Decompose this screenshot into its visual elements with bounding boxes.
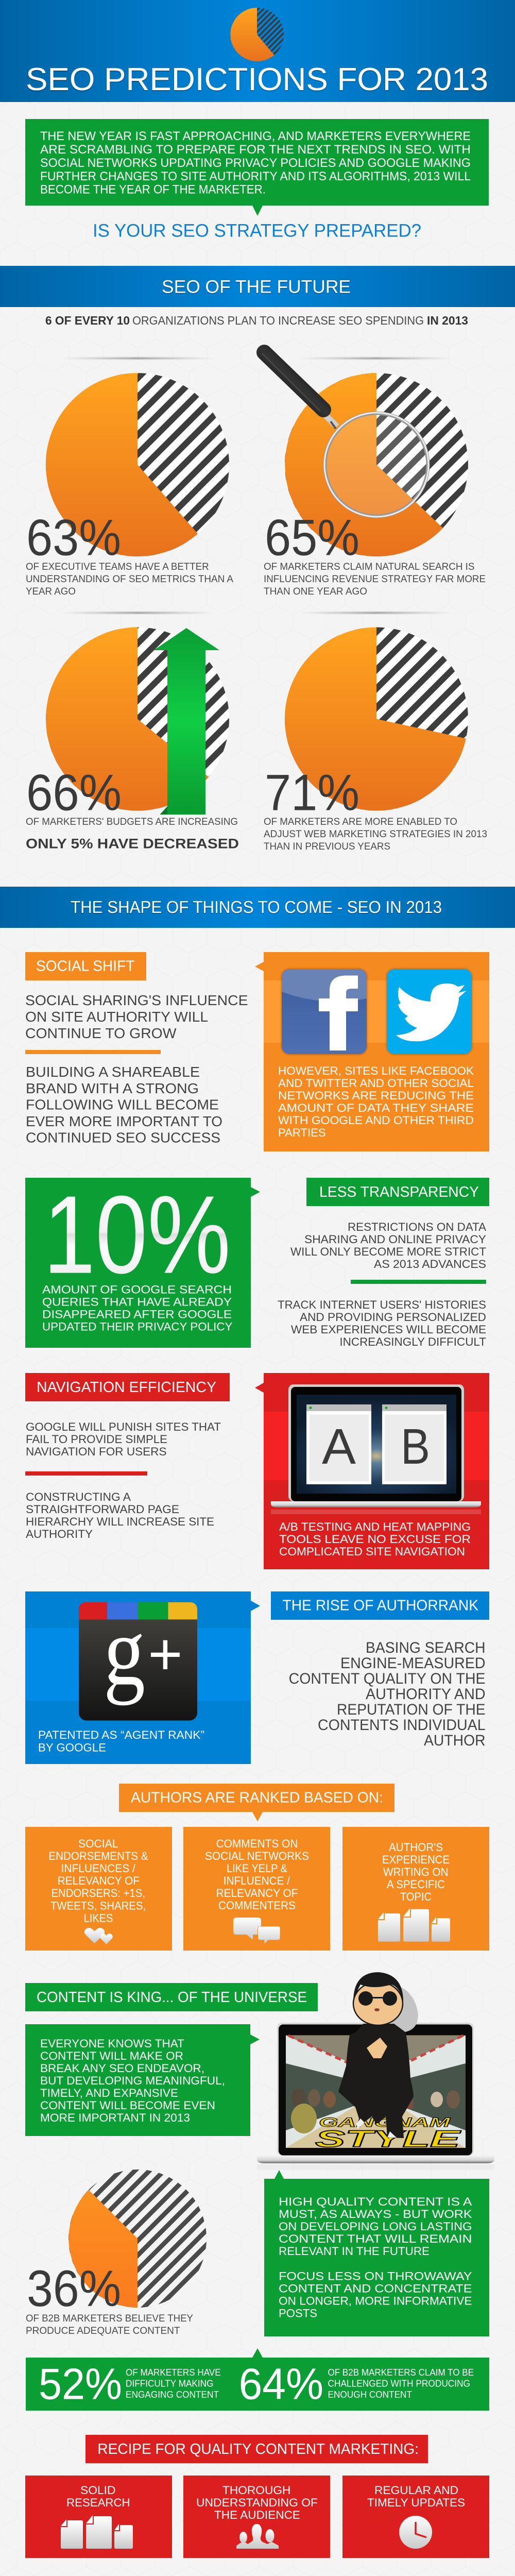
panel: everyone knows: MORE IMPORTANT IN 2013: [40, 2111, 190, 2124]
text: google will punish: [26, 1420, 221, 1458]
header banner: [0, 0, 515, 102]
text: social sharing influence: CONTINUE TO GROW: [25, 1025, 177, 1041]
text: basing search: ENGINE-MEASURED: [340, 1655, 486, 1672]
pie chart: 71%: 71%: [265, 764, 359, 821]
panel: comments on social networks: LIKE YELP &: [227, 1862, 287, 1875]
text: shareable brand: [26, 1064, 222, 1146]
panel: 52 and 64 percent: CHALLENGED WITH PRODUCING: [328, 2379, 470, 2389]
text: basing search: REPUTATION OF THE: [337, 1701, 486, 1718]
panel: A/B testing: [255, 1373, 489, 1569]
tag: recipe for quality content: RECIPE FOR QUALITY CONTENT MARKETING:: [97, 2441, 419, 2458]
text: restrictions: RESTRICTIONS ON DATA: [348, 1221, 486, 1233]
panel: 52 and 64 percent: OF MARKETERS HAVE: [126, 2367, 221, 2378]
panel: high quality content: CONTENT AND CONCENTRATE: [279, 2282, 472, 2295]
icon: laptop with A and B windows: B: [401, 1418, 430, 1475]
panel: solid research: SOLID: [80, 2484, 115, 2497]
panel: comments on social networks: COMMENTERS: [218, 1899, 296, 1912]
illustration: laptop with cartoon: [257, 1972, 494, 2170]
text: social sharing influence: SOCIAL SHARING'S INFLUENCE: [25, 992, 248, 1008]
pie chart: 63%: [26, 358, 233, 597]
panel: 52 and 64 percent: 52%: [39, 2360, 122, 2409]
tag: navigation efficiency: NAVIGATION EFFICIENCY: [37, 1379, 216, 1396]
text: track internet users: AND PROVIDING PERSONALIZED: [300, 1311, 486, 1324]
panel: social endorsements: LIKES: [84, 1911, 113, 1925]
intro callout: SOCIAL NETWORKS UPDATING PRIVACY POLICIES AND GOOGLE MAKING: [40, 156, 471, 170]
panel: author experience: WRITING ON: [383, 1866, 448, 1878]
icon: google plus: g: [104, 1597, 145, 1706]
panel: author experience: [342, 1827, 489, 1951]
intro callout: BECOME THE YEAR OF THE MARKETER.: [40, 182, 266, 197]
pie chart: 36%: OF B2B MARKETERS BELIEVE THEY: [26, 2313, 193, 2324]
intro callout: ARE SCRAMBLING TO PREPARE FOR THE NEXT TRENDS IN SEO. WITH: [40, 143, 471, 157]
panel: 52 and 64 percent: [26, 2348, 489, 2411]
panel: social networks: AMOUNT OF DATA THEY SHARE: [278, 1101, 474, 1114]
panel: everyone knows: EVERYONE KNOWS THAT: [40, 2037, 184, 2050]
icon: green up arrow: [153, 628, 219, 815]
icon: hearts: [84, 1928, 113, 1944]
panel: thorough understanding: UNDERSTANDING OF: [196, 2496, 318, 2509]
pie chart: 71%: ADJUST WEB MARKETING STRATEGIES IN 2013: [264, 829, 487, 840]
panel: comments on social networks: INFLUENCE /: [224, 1874, 290, 1887]
text: shareable brand: BUILDING A SHAREABLE: [26, 1064, 200, 1080]
panel: everyone knows: CONTENT WILL MAKE OR: [40, 2049, 183, 2062]
panel: google plus: PATENTED AS “AGENT RANK”: [38, 1728, 204, 1741]
text: google will punish: FAIL TO PROVIDE SIMPLE: [26, 1433, 167, 1446]
panel: 52 and 64 percent: 64%: [239, 2360, 323, 2409]
pie chart: 66% with arrow: 66%: [26, 764, 122, 821]
panel: social networks: PARTIES: [278, 1126, 326, 1139]
panel: high quality content: ON DEVELOPING LONG LASTING: [279, 2220, 472, 2233]
panel: social endorsements: ENDORSERS: +1S,: [52, 1887, 145, 1900]
tag: less transparency: LESS TRANSPARENCY: [319, 1184, 479, 1200]
text: social sharing influence: [25, 992, 248, 1041]
icon: google plus: [79, 1597, 197, 1721]
pie chart: 65% with magnifier: 65%: [265, 509, 359, 566]
icon: speech bubbles: [233, 1918, 280, 1944]
panel: author experience: TOPIC: [400, 1890, 432, 1903]
panel: social endorsements: INFLUENCES /: [61, 1862, 135, 1875]
tag: content is king: CONTENT IS KING... OF THE UNIVERSE: [37, 1989, 307, 2006]
text: restrictions: AS 2013 ADVANCES: [374, 1258, 486, 1270]
pie chart: 63%: YEAR AGO: [26, 586, 76, 597]
text: page hierarchy: HIERARCHY WILL INCREASE SITE: [26, 1515, 214, 1528]
panel: google plus: [25, 1591, 260, 1764]
panel: high quality content: POSTS: [279, 2307, 317, 2320]
pie chart: 66% with arrow: OF MARKETERS' BUDGETS ARE INCREASING: [26, 817, 238, 827]
panel: comments on social networks: SOCIAL NETWORKS: [205, 1850, 309, 1862]
text: basing search: BASING SEARCH: [366, 1639, 486, 1656]
panel: high quality content: MUST, AS ALWAYS - BUT WORK: [279, 2208, 472, 2221]
text: basing search: AUTHORITY AND: [366, 1686, 486, 1703]
text: page hierarchy: [26, 1490, 214, 1540]
icon: twitter: [387, 969, 472, 1054]
pie chart: 63%: 63%: [26, 509, 121, 566]
panel: high quality content: ON LONGER, MORE INFORMATIVE: [279, 2295, 472, 2308]
tag: content is king: [25, 1983, 318, 2011]
panel: everyone knows: TIMELY, AND EXPANSIVE: [40, 2087, 178, 2099]
panel: 10 percent: [25, 1173, 260, 1348]
pie chart: 71%: [264, 612, 487, 852]
panel: everyone knows: [25, 2024, 260, 2136]
pie chart: 63%: OF EXECUTIVE TEAMS HAVE A BETTER: [26, 562, 209, 572]
tag: navigation efficiency: [25, 1373, 230, 1401]
section banner: SEO of the future: [0, 266, 515, 307]
intro callout: [25, 119, 489, 216]
icon: clock: [399, 2516, 432, 2549]
text: shareable brand: EVER MORE IMPORTANT TO: [26, 1113, 222, 1129]
text: google will punish: GOOGLE WILL PUNISH SITES THAT: [26, 1420, 221, 1433]
panel: 10 percent: DISAPPEARED AFTER GOOGLE: [42, 1308, 232, 1321]
panel: social endorsements: RELEVANCY OF: [58, 1874, 140, 1887]
panel: high quality content: CONTENT THAT WILL REMAIN: [279, 2232, 472, 2245]
panel: solid research: RESEARCH: [66, 2496, 130, 2509]
spending statement: IN 2013: [427, 314, 468, 327]
text: shareable brand: CONTINUED SEO SUCCESS: [26, 1130, 220, 1146]
intro callout: THE NEW YEAR IS FAST APPROACHING, AND MARKETERS EVERYWHERE: [40, 129, 471, 143]
intro callout: FURTHER CHANGES TO SITE AUTHORITY AND ITS ALGORITHMS, 2013 WILL: [40, 170, 471, 183]
section banner: SEO of the future: SEO OF THE FUTURE: [162, 277, 351, 297]
panel: 10 percent: AMOUNT OF GOOGLE SEARCH: [42, 1283, 232, 1296]
text: shareable brand: FOLLOWING WILL BECOME: [26, 1097, 219, 1113]
panel: regular and timely: REGULAR AND: [374, 2484, 458, 2497]
panel: thorough understanding: THOROUGH: [222, 2484, 290, 2497]
spending statement: ORGANIZATIONS PLAN TO INCREASE SEO SPENDING: [132, 314, 424, 327]
panel: social endorsements: ENDORSEMENTS &: [48, 1850, 148, 1862]
panel: regular and timely: [342, 2476, 489, 2558]
text: page hierarchy: AUTHORITY: [26, 1528, 93, 1540]
panel: regular and timely: TIMELY UPDATES: [367, 2496, 465, 2509]
spending statement: 6 OF EVERY 10: [45, 314, 130, 327]
text: track internet users: [278, 1298, 486, 1348]
panel: high quality content: HIGH QUALITY CONTENT IS A: [279, 2195, 472, 2208]
text: basing search: CONTENTS INDIVIDUAL: [318, 1717, 486, 1734]
tag: social shift: [25, 952, 146, 980]
panel: A/B testing: TOOLS LEAVE NO EXCUSE FOR: [279, 1533, 471, 1546]
tag: less transparency: [306, 1178, 489, 1206]
tag: rise of authorrank: THE RISE OF AUTHORRANK: [282, 1598, 478, 1614]
icon: people: [236, 2524, 279, 2549]
panel: 10 percent: UPDATED THEIR PRIVACY POLICY: [42, 1320, 233, 1333]
text: shareable brand: BRAND WITH A STRONG: [26, 1080, 199, 1096]
icon: facebook: [282, 969, 367, 1054]
pie chart: 36%: 36%: [27, 2260, 121, 2317]
callout: authors are ranked: AUTHORS ARE RANKED BASED ON:: [131, 1790, 383, 1806]
panel: thorough understanding: THE AUDIENCE: [214, 2509, 300, 2521]
text: track internet users: INCREASINGLY DIFFICULT: [339, 1335, 486, 1348]
icon: header pie chart: [230, 8, 284, 61]
icon: magnifying glass: [262, 352, 428, 517]
section banner: shape of things to come: [0, 887, 515, 928]
panel: social networks: NETWORKS ARE REDUCING THE: [278, 1089, 474, 1102]
tag: social shift: SOCIAL SHIFT: [36, 958, 135, 975]
panel: google plus: BY GOOGLE: [38, 1741, 106, 1754]
pie chart: 66% with arrow: ONLY 5% HAVE DECREASED: [26, 836, 239, 851]
pie chart: 65% with magnifier: THAN ONE YEAR AGO: [264, 586, 367, 597]
icon: documents: [61, 2515, 133, 2549]
panel: 52 and 64 percent: DIFFICULTY MAKING: [126, 2379, 213, 2389]
panel: comments on social networks: COMMENTS ON: [216, 1837, 298, 1850]
icon: google plus: +: [148, 1621, 183, 1687]
panel: high quality content: RELEVANT IN THE FUTURE: [279, 2245, 430, 2258]
panel: thorough understanding: [183, 2476, 330, 2558]
pie chart: 36%: PRODUCE ADEQUATE CONTENT: [26, 2326, 180, 2336]
pie chart: 65% with magnifier: OF MARKETERS CLAIM NATURAL SEARCH IS: [264, 562, 475, 572]
panel: author experience: EXPERIENCE: [382, 1853, 450, 1866]
panel: social endorsements: SOCIAL: [78, 1837, 118, 1850]
pie chart: 71%: OF MARKETERS ARE MORE ENABLED TO: [264, 817, 457, 827]
text: google will punish: NAVIGATION FOR USERS: [26, 1445, 167, 1458]
text: restrictions: SHARING AND ONLINE PRIVACY: [304, 1233, 486, 1246]
laptop screen scene: STYLE: [315, 2126, 462, 2152]
laptop screen scene: GANGNAM: [319, 2115, 451, 2130]
pie chart: 71%: THAN IN PREVIOUS YEARS: [264, 841, 390, 852]
text: track internet users: TRACK INTERNET USERS' HISTORIES: [278, 1298, 486, 1311]
icon: laptop with A and B windows: A: [322, 1418, 356, 1475]
text: track internet users: WEB EXPERIENCES WILL BECOME: [291, 1323, 486, 1336]
text: basing search: CONTENT QUALITY ON THE: [289, 1670, 486, 1687]
panel: social endorsements: TWEETS, SHARES,: [50, 1899, 146, 1912]
panel: everyone knows: CONTENT WILL BECOME EVEN: [40, 2099, 215, 2112]
panel: high quality content: FOCUS LESS ON THROWAWAY: [279, 2270, 472, 2282]
text: social sharing influence: ON SITE AUTHORITY WILL: [25, 1009, 208, 1025]
text: restrictions: [290, 1221, 486, 1270]
text: page hierarchy: CONSTRUCTING A: [26, 1490, 131, 1503]
title: SEO PREDICTIONS FOR 2013: [26, 62, 488, 97]
panel: 52 and 64 percent: ENOUGH CONTENT: [328, 2389, 412, 2400]
panel: 10 percent: QUERIES THAT HAVE ALREADY: [42, 1296, 232, 1309]
panel: social networks: HOWEVER, SITES LIKE FACEBOOK: [278, 1064, 474, 1077]
laptop screen scene: [286, 2036, 466, 2152]
panel: social networks: [255, 952, 489, 1151]
panel: author experience: AUTHOR'S: [389, 1841, 443, 1854]
pie chart: 63%: UNDERSTANDING OF SEO METRICS THAN A: [26, 574, 233, 585]
panel: 52 and 64 percent: OF B2B MARKETERS CLAIM TO BE: [328, 2367, 474, 2378]
panel: 10 percent: 10%: [43, 1173, 231, 1297]
cartoon figure: [338, 1972, 418, 2138]
panel: author experience: A SPECIFIC: [387, 1878, 445, 1891]
text: restrictions: WILL ONLY BECOME MORE STRICT: [290, 1245, 486, 1258]
icon: laptop with A and B windows: [271, 1384, 481, 1514]
panel: social networks: WITH GOOGLE AND OTHER THIRD: [278, 1114, 474, 1127]
panel: everyone knows: BUT DEVELOPING MEANINGFUL,: [40, 2074, 225, 2087]
pie chart: 66% with arrow: [26, 612, 239, 851]
tag: recipe for quality content: [85, 2435, 428, 2463]
panel: social endorsements: [25, 1827, 172, 1951]
pie chart: 65% with magnifier: [262, 352, 486, 597]
icon: documents: [378, 1908, 450, 1942]
panel: social networks: AND TWITTER AND OTHER SOCIAL: [278, 1077, 474, 1090]
text: page hierarchy: STRAIGHTFORWARD PAGE: [26, 1503, 179, 1516]
question heading: IS YOUR SEO STRATEGY PREPARED?: [93, 221, 421, 241]
section banner: shape of things to come: THE SHAPE OF THINGS TO COME - SEO IN 2013: [71, 897, 442, 917]
text: basing search: [289, 1639, 486, 1749]
panel: everyone knows: BREAK ANY SEO ENDEAVOR,: [40, 2062, 204, 2075]
panel: high quality content: [264, 2170, 489, 2336]
pie chart: 65% with magnifier: INFLUENCING REVENUE STRATEGY FAR MORE: [264, 574, 486, 585]
pie chart: 36%: [26, 2170, 207, 2336]
panel: 52 and 64 percent: ENGAGING CONTENT: [126, 2389, 219, 2400]
panel: A/B testing: A/B TESTING AND HEAT MAPPING: [279, 1520, 471, 1533]
tag: rise of authorrank: [271, 1591, 489, 1620]
panel: comments on social networks: [183, 1827, 330, 1951]
text: basing search: AUTHOR: [424, 1732, 486, 1749]
panel: solid research: [25, 2476, 172, 2558]
callout: authors are ranked: [119, 1784, 394, 1822]
panel: A/B testing: COMPLICATED SITE NAVIGATION: [279, 1545, 465, 1558]
panel: comments on social networks: RELEVANCY OF: [216, 1887, 298, 1900]
